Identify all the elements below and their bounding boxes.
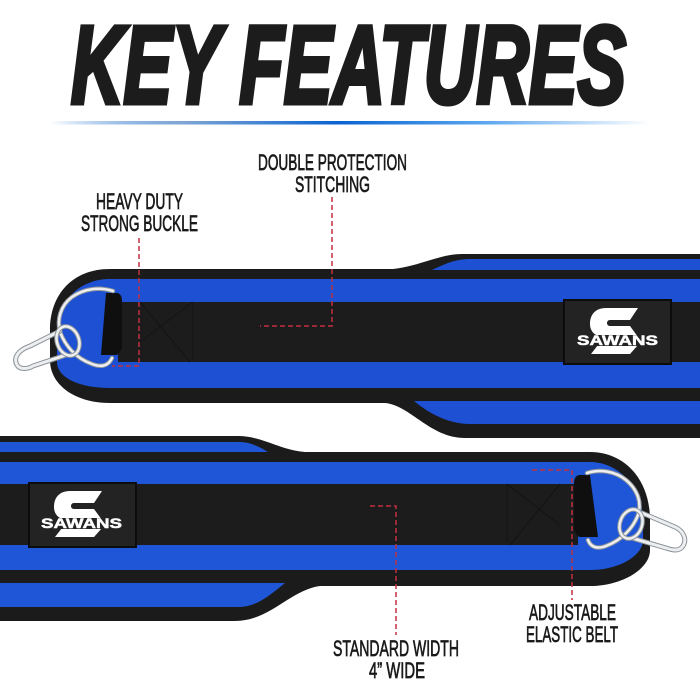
- belt outer edge: [50, 254, 700, 438]
- buckle loop: [574, 475, 598, 537]
- lower blue strip: [0, 583, 285, 607]
- leader line: stitching: [260, 197, 332, 326]
- logo patch: SAWANS: [577, 332, 658, 348]
- label: adjustable elastic belt: ELASTIC BELT: [526, 622, 618, 647]
- logo patch: [29, 483, 136, 547]
- D-ring: [587, 471, 640, 548]
- carabiner: [16, 323, 83, 368]
- label: double protection stitching: STITCHING: [295, 172, 370, 197]
- upper blue strip: [432, 259, 700, 270]
- label: standard width: 4” WIDE: [369, 658, 425, 683]
- label: heavy duty strong buckle: HEAVY DUTY: [96, 189, 183, 214]
- leader line: width: [370, 506, 396, 635]
- label: adjustable elastic belt: [526, 600, 618, 647]
- buckle loop: [101, 293, 122, 355]
- leader line: elastic belt: [532, 470, 572, 600]
- stitching: [507, 484, 560, 545]
- lower blue strip: [414, 401, 700, 424]
- leader line: buckle: [112, 238, 139, 366]
- label: heavy duty strong buckle: STRONG BUCKLE: [81, 211, 198, 236]
- webbing strap: [118, 302, 700, 362]
- carabiner: [616, 506, 685, 550]
- title underline: [50, 121, 650, 124]
- webbing strap: [0, 484, 578, 545]
- belt outer edge: [0, 436, 650, 621]
- label: double protection stitching: DOUBLE PROTECTION: [258, 150, 407, 175]
- logo patch: [564, 300, 671, 364]
- D-ring: [59, 289, 113, 366]
- label: double protection stitching: [258, 150, 407, 197]
- label: standard width: STANDARD WIDTH: [333, 636, 459, 661]
- belt: bottom: [0, 436, 685, 621]
- logo patch: SAWANS: [41, 515, 122, 531]
- label: standard width: [333, 636, 459, 683]
- belt: top: [16, 254, 700, 438]
- main blue band: [0, 462, 643, 570]
- main blue band: [57, 279, 700, 388]
- upper blue strip: [0, 442, 268, 452]
- label: heavy duty strong buckle: [81, 189, 198, 236]
- stitching: [140, 302, 193, 362]
- label: adjustable elastic belt: ADJUSTABLE: [529, 600, 616, 625]
